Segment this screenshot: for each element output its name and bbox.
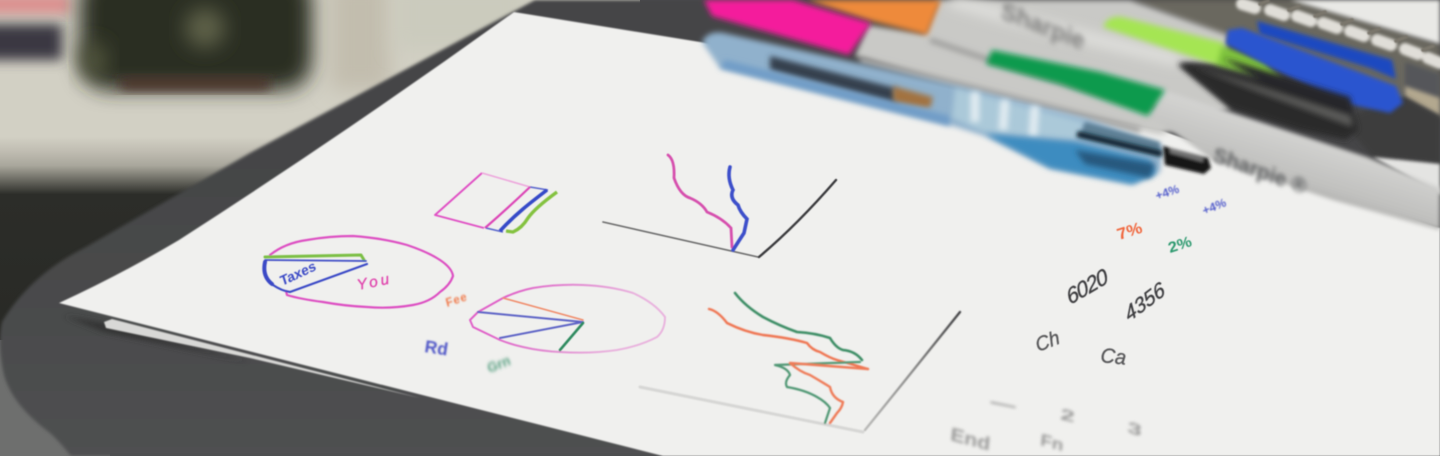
pie label: Taxes: Taxes	[278, 257, 318, 289]
handwritten table: percent values	[1115, 219, 1194, 257]
marker: pink cap	[704, 0, 871, 55]
blurred background room	[0, 0, 640, 456]
pie label: Rd: Rd	[423, 336, 449, 360]
handwritten table: blurred row labels: 3	[1127, 418, 1143, 440]
marker: orange cap	[807, 0, 941, 35]
pie label: Fee: Fee	[445, 291, 469, 310]
chart axes	[603, 180, 836, 257]
silver marker barrels between caps	[855, 0, 1232, 135]
handwritten table: quantities: 6020	[1063, 263, 1112, 310]
marker: dark blue cap	[1257, 21, 1396, 79]
line chart: green and orange lines	[640, 293, 960, 432]
pie chart: fee, rd, grn	[423, 285, 665, 376]
marker: lime cap	[1103, 17, 1283, 82]
handwritten table: quantities	[1033, 263, 1169, 370]
notebook with spiral binding	[1130, 0, 1440, 118]
handwritten table: quantities: Ca	[1099, 345, 1127, 370]
handwritten table: blurred row labels	[950, 391, 1143, 455]
handwritten table: blue values: +4%	[1201, 195, 1228, 218]
brand lettering on barrel: Sharpie ®	[1211, 144, 1309, 199]
handwritten table: blurred row labels: Fn	[1040, 430, 1064, 455]
handwritten table: percent values: 2%	[1166, 234, 1194, 257]
handwritten table: blue values: +4%	[1154, 182, 1181, 203]
marker: blue cap	[1226, 28, 1403, 113]
handwritten table: quantities: 4356	[1121, 278, 1169, 327]
pie label: Grn: Grn	[485, 353, 512, 376]
bar sketch: stacked box	[435, 173, 557, 232]
chart axes	[640, 312, 960, 432]
handwritten table: quantities: Ch	[1033, 327, 1063, 357]
marker: black cap	[1178, 58, 1358, 140]
handwritten table: blurred row labels: 2	[1060, 405, 1076, 426]
handwritten table: percent values: 7%	[1115, 219, 1144, 244]
translucent blue pen	[702, 32, 1211, 184]
pie label: You: You	[355, 270, 394, 294]
handwritten table: blurred row labels: —	[990, 391, 1018, 416]
table sliver at right under markers	[1340, 96, 1440, 195]
line chart: pink and blue lines	[603, 155, 836, 257]
handwritten table: blurred row labels: End	[950, 424, 991, 455]
marker: green cap with labelled silver barrel	[986, 50, 1440, 230]
handwritten table: blue values	[1154, 182, 1228, 218]
pen nib	[1163, 146, 1211, 174]
pie chart: taxes and you	[264, 236, 453, 308]
